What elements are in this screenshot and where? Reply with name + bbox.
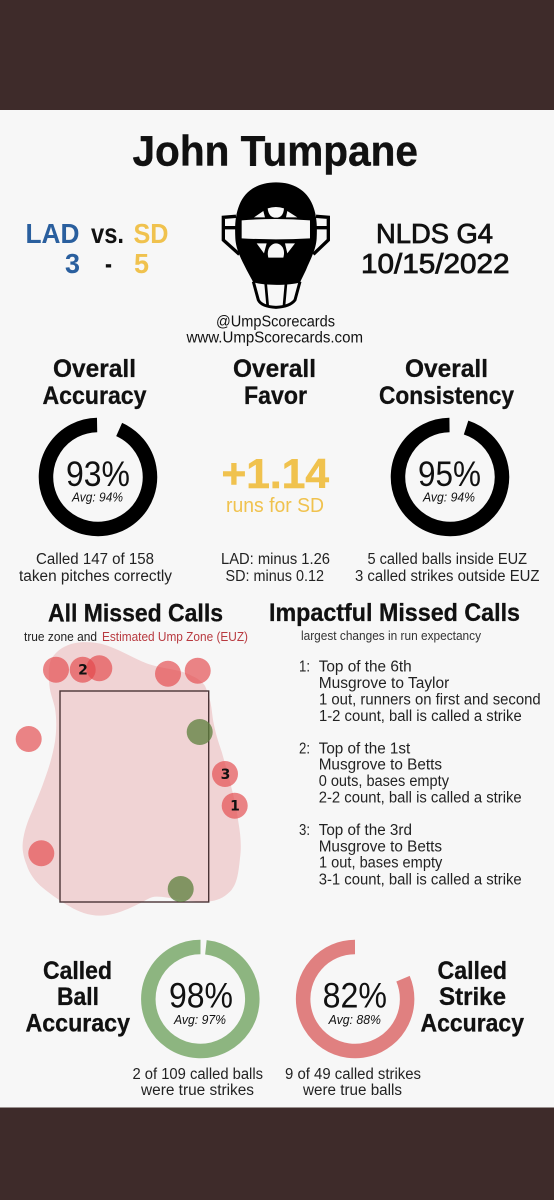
subtitle: Estimated Ump Zone (EUZ) [102,630,248,644]
favor value: +1.14 [222,450,330,497]
favor value: runs for SD [226,495,324,517]
missed call 1: 1 out, runners on first and second [319,691,541,708]
missed call 1: 1: [299,659,310,676]
ring chart [46,425,150,529]
teams and score: 5 [134,248,149,279]
missed call 2 [299,740,522,807]
caption [355,551,540,585]
teams and score: - [105,248,112,279]
caption [221,551,330,585]
heading: Ball [57,983,99,1011]
heading: Impactful Missed Calls [269,599,520,627]
game info [361,218,510,279]
true strike zone [60,691,209,902]
panel: called ball accuracy [26,947,263,1099]
subtitle: largest changes in run expectancy [301,629,482,643]
ring chart [398,425,502,529]
missed call 1 [299,659,541,725]
caption: Called 147 of 158 [36,551,154,568]
caption: were true strikes [140,1082,254,1099]
caption [285,1066,421,1099]
missed call 2: 2: [299,740,310,757]
heading [26,957,130,1038]
panel: overall accuracy [19,355,172,585]
ring chart [148,947,252,1051]
heading: Overall [405,355,488,383]
percentage: 98% [169,977,233,1016]
title: John Tumpane [132,128,418,176]
caption [19,551,172,585]
heading [42,355,147,410]
marker numbers [78,662,240,814]
percentage: Avg: 94% [422,490,475,505]
caption: 2 of 109 called balls [132,1066,263,1083]
estimated ump zone [23,642,241,916]
social handle and website [186,314,363,346]
percentage: Avg: 88% [328,1012,381,1027]
heading [379,355,514,410]
ring chart [303,947,407,1051]
caption: were true balls [302,1082,402,1099]
heading: All Missed Calls [48,600,223,628]
caption: 3 called strikes outside EUZ [355,568,540,585]
caption: SD: minus 0.12 [226,568,324,585]
panel: all missed calls [16,600,248,916]
percentage: Avg: 97% [173,1012,226,1027]
percentage: 95% [418,455,481,494]
heading [420,957,524,1038]
missed call 1: 1-2 count, ball is called a strike [319,708,522,725]
social handle and website: www.UmpScorecards.com [186,330,363,346]
teams and score [26,218,168,279]
caption [132,1066,263,1099]
heading: Overall [53,355,136,383]
missed call 3: 3: [299,822,310,839]
teams and score: 3 [65,248,80,279]
heading: Overall [233,355,316,383]
percentage: 82% [323,977,387,1016]
teams and score: vs. [91,218,124,249]
panel: overall consistency [355,355,540,585]
heading: Called [438,957,507,985]
social handle and website: @UmpScorecards [216,314,335,330]
game info: 10/15/2022 [361,248,510,279]
missed call 3: Top of the 3rd [319,822,412,839]
heading: Favor [244,382,307,410]
missed call 2: 0 outs, bases empty [319,773,449,790]
missed call 3: Musgrove to Betts [319,838,442,855]
missed call 2: 2-2 count, ball is called a strike [319,790,522,807]
heading [233,355,316,410]
favor value [222,450,330,517]
marker numbers: 3 [221,767,230,783]
subtitle: true zone and [24,630,97,644]
missed call 3 [299,822,522,888]
marker numbers: 1 [230,798,240,814]
subtitle [24,630,248,644]
top band [0,0,554,110]
bottom band [0,1108,554,1200]
caption: LAD: minus 1.26 [221,551,330,568]
missed call 1: Top of the 6th [319,659,412,676]
heading: Consistency [379,382,514,410]
heading: Accuracy [26,1010,130,1038]
percentage: Avg: 94% [71,490,123,505]
game info: NLDS G4 [376,218,493,249]
missed call 3: 3-1 count, ball is called a strike [319,871,522,888]
panel: called strike accuracy [285,947,524,1099]
caption: 9 of 49 called strikes [285,1066,421,1083]
missed call 1: Musgrove to Taylor [319,675,449,692]
icon: umpire mask [223,182,328,307]
heading: Accuracy [420,1010,524,1038]
missed call 3: 1 out, bases empty [319,855,443,872]
missed call 2: Musgrove to Betts [319,757,442,774]
marker numbers: 2 [78,662,88,678]
heading: Strike [439,983,506,1011]
panel: overall favor [221,355,330,585]
missed call markers [16,655,248,902]
teams and score: SD [134,218,168,249]
caption: 5 called balls inside EUZ [368,551,527,568]
missed call 2: Top of the 1st [319,740,411,757]
caption: taken pitches correctly [19,568,172,585]
panel: impactful missed calls [269,599,541,888]
percentage: 93% [66,455,130,494]
heading: Accuracy [42,382,147,410]
chart: strike zone plot [16,642,248,916]
teams and score: LAD [26,218,80,249]
heading: Called [43,957,112,985]
